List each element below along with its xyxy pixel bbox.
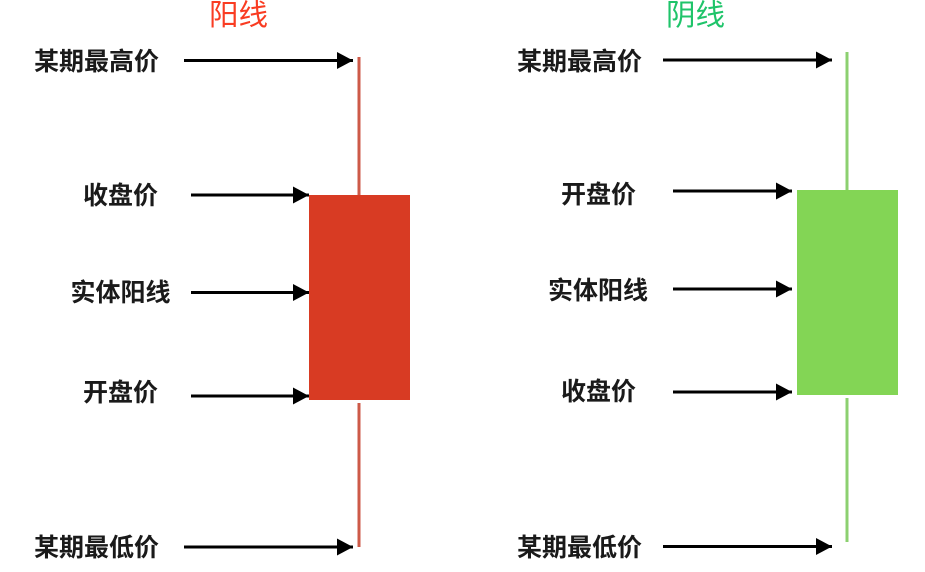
arrow: real body xyxy=(673,288,792,290)
arrow: period high xyxy=(663,58,832,62)
label: period low: 某期最低价 xyxy=(517,534,642,562)
label: period high: 某期最高价 xyxy=(517,48,642,76)
label: close: 收盘价 xyxy=(83,182,158,210)
arrow: period high xyxy=(184,59,353,62)
arrow: close xyxy=(191,194,309,196)
label: close: 收盘价 xyxy=(561,378,636,406)
label: open: 开盘价 xyxy=(83,379,158,407)
label: open: 开盘价 xyxy=(561,181,636,209)
label: real body: 实体阳线 xyxy=(548,277,648,305)
label: period high: 某期最高价 xyxy=(34,48,159,76)
arrow: open xyxy=(191,394,309,398)
label: period low: 某期最低价 xyxy=(34,534,159,562)
arrow: period low xyxy=(184,546,353,548)
panel: bullish candlestick xyxy=(34,0,410,562)
label: real body: 实体阳线 xyxy=(70,279,171,307)
arrow: real body xyxy=(191,291,309,294)
arrow: close xyxy=(673,390,792,394)
arrow: open xyxy=(673,190,792,192)
arrow: period low xyxy=(663,545,832,548)
candlestick: red xyxy=(309,57,410,547)
candlestick: green xyxy=(797,52,898,542)
panel: bearish candlestick xyxy=(517,0,898,562)
